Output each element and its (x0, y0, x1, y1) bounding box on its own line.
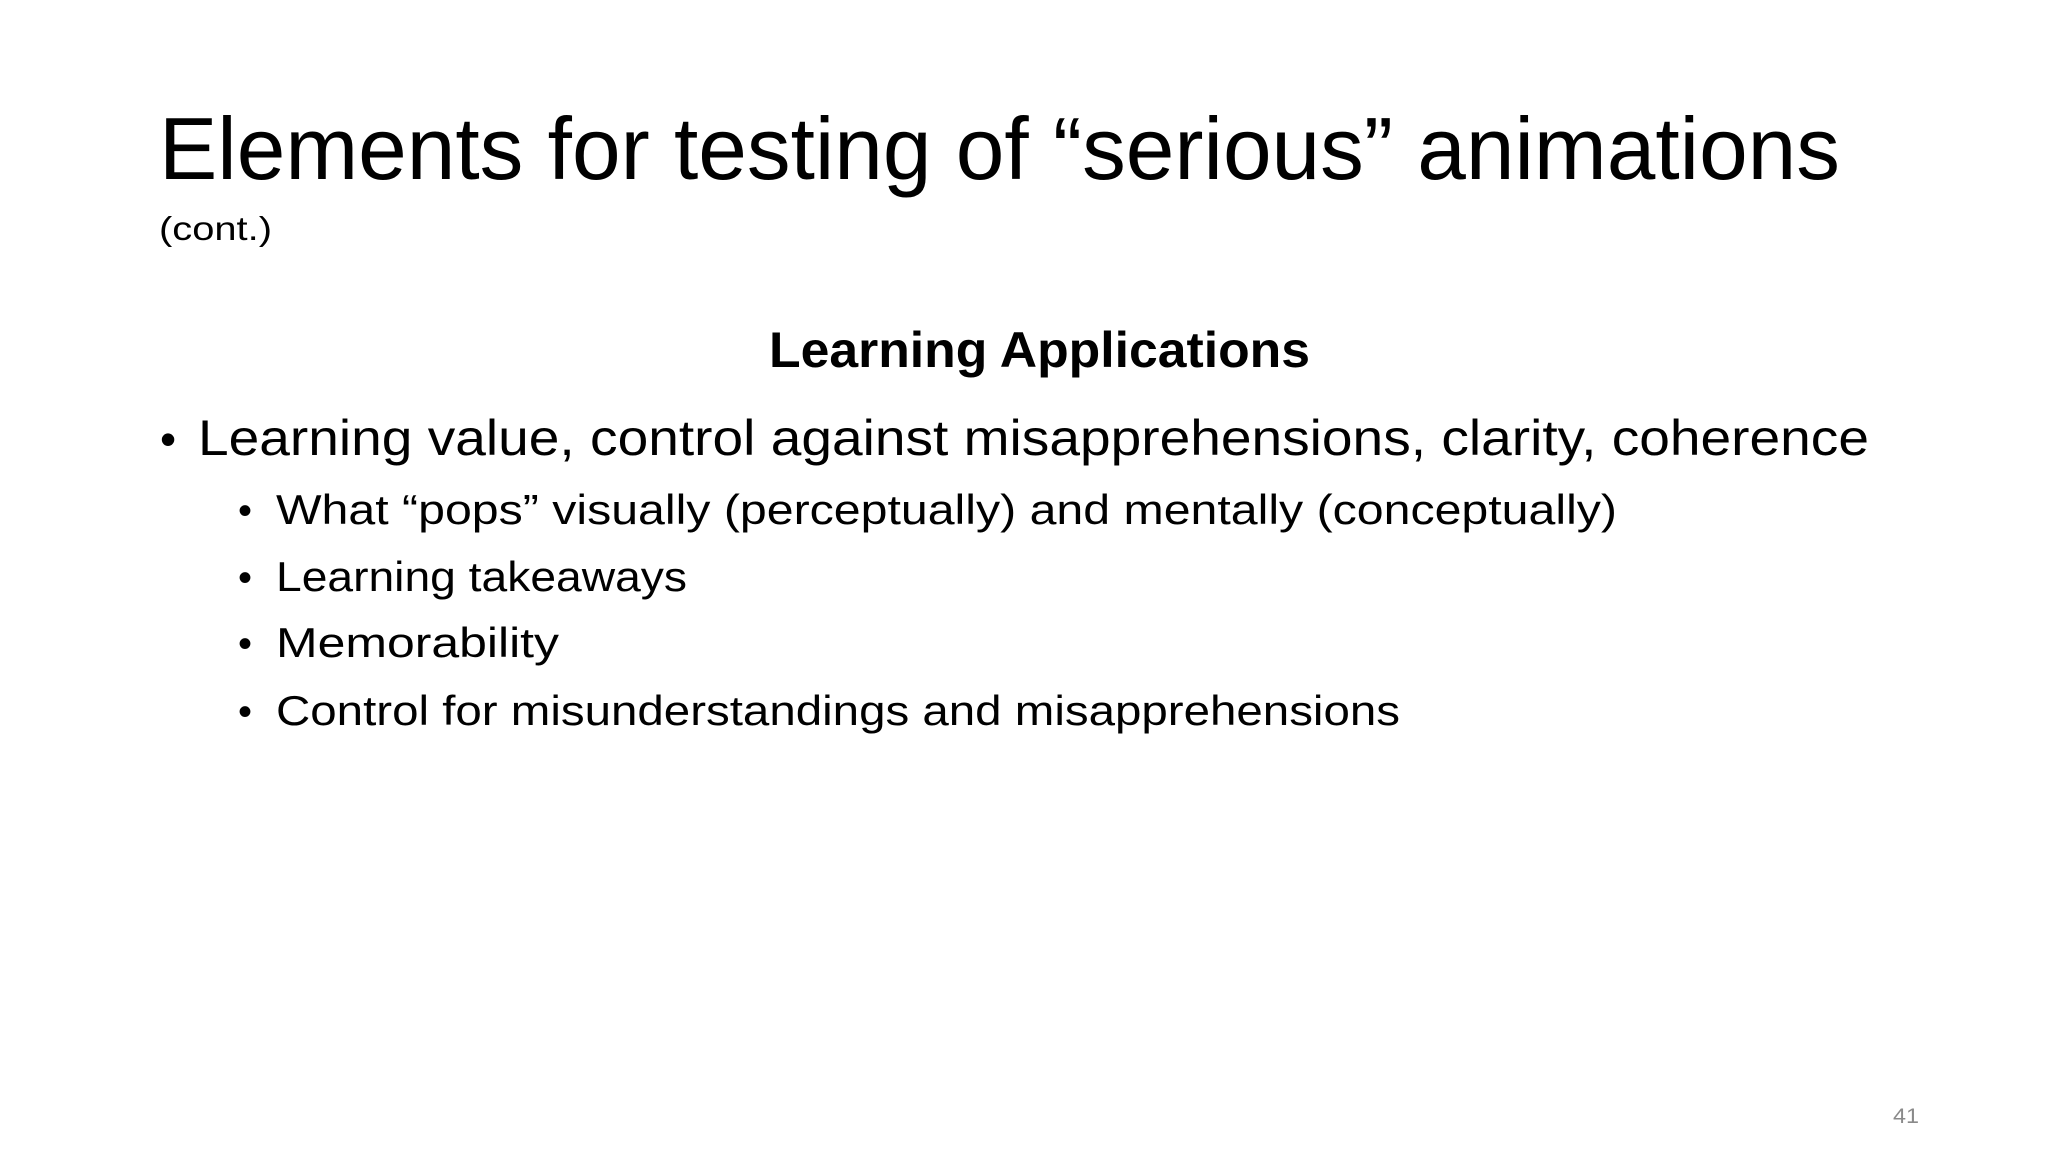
sub bullet 4: Control for misunderstandings and misapprehensions (276, 687, 1400, 734)
sub bullet 4: • (238, 690, 252, 734)
title: Elements for testing of “serious” animations (159, 99, 1840, 198)
main bullet: Learning value, control against misapprehensions, clarity, coherence (198, 410, 1869, 466)
sub bullet 2: Learning takeaways (276, 553, 687, 600)
sub bullet 3: • (238, 622, 252, 666)
sub bullet 3: Memorability (276, 619, 559, 666)
page number: 41 (1893, 1105, 1919, 1128)
subtitle: (cont.): (cont.) (159, 210, 272, 247)
bullet list (160, 410, 1869, 734)
sub bullet 2: • (238, 556, 252, 600)
main bullet: • (160, 413, 176, 465)
sub bullet 1: • (238, 489, 252, 533)
heading: Learning Applications: Learning Applications (769, 322, 1310, 378)
sub bullet 1: What “pops” visually (perceptually) and mentally (conceptually) (276, 486, 1617, 533)
